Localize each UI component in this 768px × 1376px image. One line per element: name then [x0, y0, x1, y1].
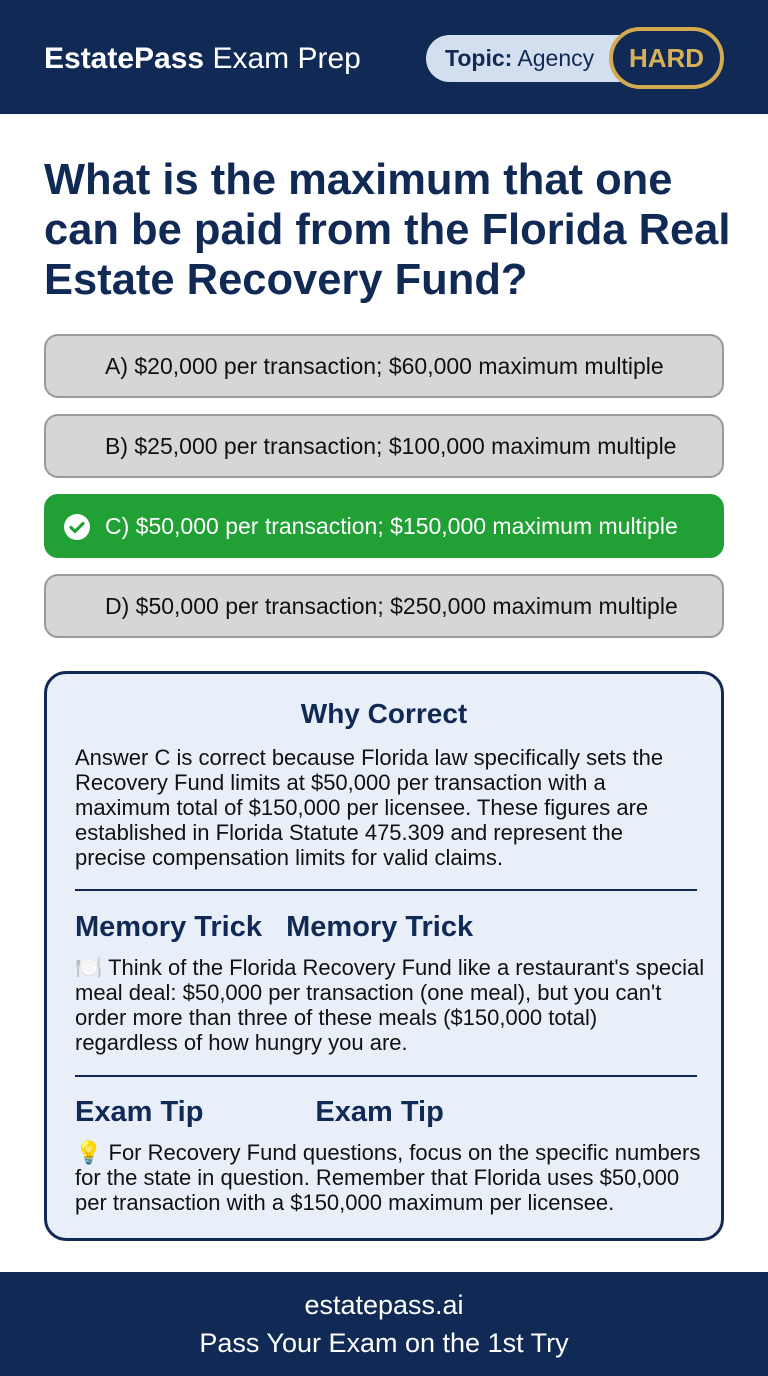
heading: memory trick: Memory Trick Memory Trick	[75, 911, 473, 943]
text: memory trick: order more than three of these meals ($150,000 total)	[75, 1005, 597, 1030]
footer	[0, 1272, 768, 1376]
topic pill	[426, 35, 656, 82]
question heading: What is the maximum that one can be paid from the Florida Real Estate Recovery Fund?	[44, 156, 730, 304]
option A	[44, 334, 724, 398]
option A: A) $20,000 per transaction; $60,000 maximum multiple	[105, 353, 664, 379]
brand title: EstatePass Exam Prep	[44, 42, 361, 75]
footer text: estatepass.ai	[304, 1290, 464, 1320]
heading: exam tip: Exam Tip Exam Tip	[75, 1096, 444, 1128]
option C correct: C) $50,000 per transaction; $150,000 maximum multiple	[105, 513, 678, 539]
text: memory trick: regardless of how hungry you are.	[75, 1030, 408, 1055]
difficulty badge: HARD	[629, 43, 704, 73]
text: exam tip: per transaction with a $150,000 maximum per licensee.	[75, 1190, 614, 1215]
option B	[44, 414, 724, 478]
footer text	[199, 1290, 569, 1358]
text: why correct: Recovery Fund limits at $50,000 per transaction with a	[75, 770, 606, 795]
footer text: Pass Your Exam on the 1st Try	[199, 1328, 569, 1358]
option C correct	[44, 494, 724, 558]
text: why correct: established in Florida Statute 475.309 and represent the	[75, 820, 623, 845]
text: why correct: maximum total of $150,000 per licensee. These figures are	[75, 795, 648, 820]
text: exam tip: for the state in question. Remember that Florida uses $50,000	[75, 1165, 679, 1190]
text: why correct: precise compensation limits for valid claims.	[75, 845, 503, 870]
panel: explanation	[44, 671, 724, 1241]
text: exam tip	[75, 1140, 700, 1215]
icon: check	[64, 514, 90, 540]
text: memory trick	[75, 955, 704, 1055]
header bar	[0, 0, 768, 114]
text: why correct: Answer C is correct because Florida law specifically sets the	[75, 745, 663, 770]
text: memory trick: 🍽️ Think of the Florida Recovery Fund like a restaurant's special	[75, 955, 704, 980]
heading: why correct: Why Correct	[301, 698, 467, 729]
difficulty badge	[609, 27, 724, 89]
text: why correct	[75, 745, 663, 870]
text: exam tip: 💡 For Recovery Fund questions, focus on the specific numbers	[75, 1140, 700, 1165]
text: memory trick: meal deal: $50,000 per transaction (one meal), but you can't	[75, 980, 661, 1005]
option D	[44, 574, 724, 638]
option D: D) $50,000 per transaction; $250,000 maximum multiple	[105, 593, 678, 619]
topic pill: Topic: Agency	[445, 45, 594, 71]
option B: B) $25,000 per transaction; $100,000 maximum multiple	[105, 433, 676, 459]
